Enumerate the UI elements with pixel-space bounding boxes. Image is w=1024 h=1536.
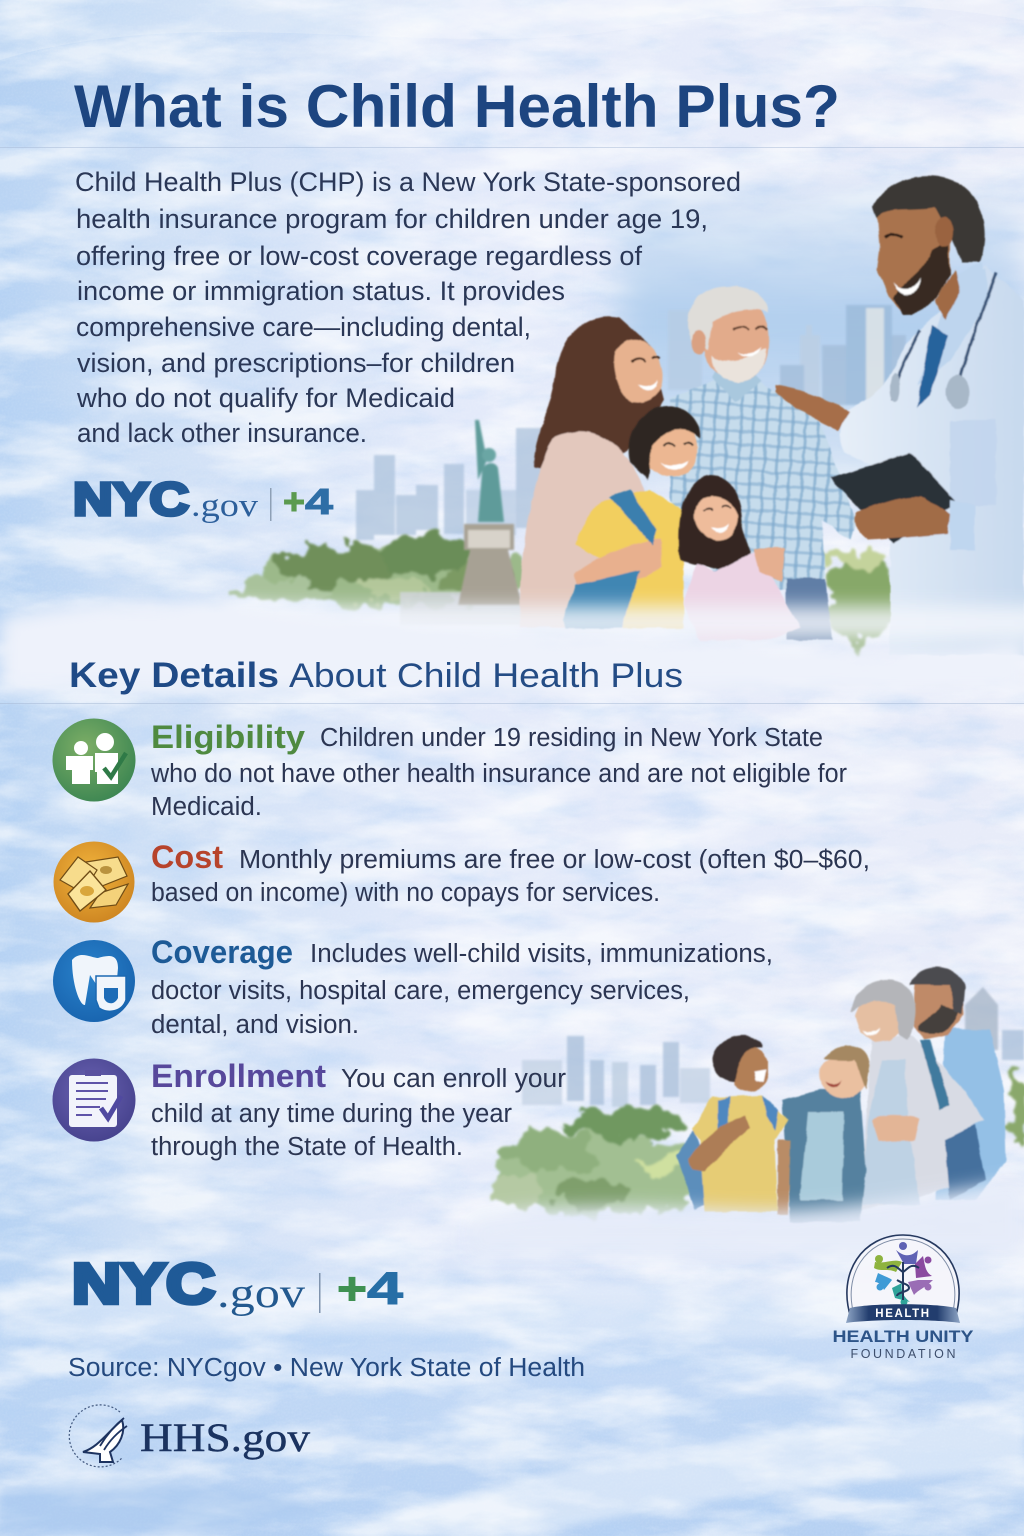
logo: Health Unity Foundation: HEALTH (875, 1308, 931, 1320)
emblem: pinwheel with caduceus (874, 1242, 933, 1306)
row: enrollment: child at any time during the year (151, 1100, 512, 1128)
doctor (775, 176, 1024, 655)
logo: NYC.gov +4 (bottom): 4 (367, 1263, 403, 1314)
intro paragraph: Child Health Plus (CHP) is a New York State-sponsored (75, 167, 741, 197)
heading: key details: Key Details (69, 656, 279, 695)
icon: clipboard with check (52, 1058, 136, 1142)
row: cost: Monthly premiums are free or low-cost (often $0–$60, (239, 846, 870, 874)
Statue of Liberty (400, 420, 522, 625)
skyline right (668, 305, 906, 405)
boy in denim jacket (782, 1046, 870, 1222)
row: cost: based on income) with no copays for services. (151, 879, 660, 907)
row: enrollment: through the State of Health. (151, 1133, 463, 1161)
trees (232, 537, 898, 642)
intro paragraph: who do not qualify for Medicaid (76, 383, 455, 413)
row: cost (54, 839, 870, 922)
logo: NYC.gov +4 (bottom): NYC (72, 1252, 215, 1316)
skyline left (356, 428, 544, 540)
man in blue shirt (910, 967, 1006, 1200)
logo: NYC.gov +4 (bottom): + (337, 1263, 367, 1314)
intro paragraph: health insurance program for children under age 19, (76, 204, 708, 234)
logo: NYC.gov +4 (top): + (283, 481, 305, 522)
row: cost: Cost (151, 839, 223, 875)
logo: NYC.gov +4 (top): 4 (305, 481, 333, 522)
row: coverage: Coverage (151, 934, 293, 970)
trees and lawn (490, 1066, 1024, 1217)
intro paragraph: comprehensive care—including dental, (76, 312, 531, 342)
logo: NYC.gov +4 (bottom) (72, 1252, 403, 1317)
row: coverage: Includes well-child visits, immunizations, (310, 940, 773, 968)
icon: tooth and shield (53, 940, 135, 1022)
intro paragraph (75, 167, 741, 448)
grandmother (851, 980, 985, 1210)
intro paragraph: and lack other insurance. (77, 418, 367, 448)
logo: NYC.gov +4 (top): NYC (73, 473, 189, 525)
logo: Health Unity Foundation: HEALTH UNITY (832, 1328, 974, 1346)
row: eligibility (52, 718, 847, 821)
row: coverage: dental, and vision. (151, 1011, 359, 1039)
logo: NYC.gov +4 (bottom): .gov (217, 1271, 305, 1317)
row: coverage: doctor visits, hospital care, emergency services, (151, 977, 690, 1005)
intro paragraph: vision, and prescriptions–for children (77, 348, 515, 378)
logo: HHS.gov: HHS.gov (140, 1415, 310, 1460)
row: enrollment: Enrollment (151, 1058, 326, 1094)
scene: second family and park (470, 967, 1024, 1255)
row: eligibility: Eligibility (151, 719, 305, 755)
mother (520, 317, 664, 627)
row: enrollment (52, 1058, 567, 1161)
small girl in pink dress (679, 475, 800, 640)
row: eligibility: Children under 19 residing in New York State (320, 724, 823, 752)
row: eligibility: who do not have other health insurance and are not eligible for (150, 760, 847, 788)
source line: Source: NYCgov • New York State of Health (68, 1354, 585, 1382)
cloud fade under scene (0, 602, 1024, 690)
scene: city, family and doctor (0, 176, 1024, 690)
logo: Health Unity Foundation (832, 1235, 974, 1361)
icon: eligibility people with check (52, 718, 136, 802)
ribbon (846, 1304, 960, 1323)
boy in yellow shirt with backpack (676, 1035, 790, 1215)
grandfather (670, 286, 856, 640)
row: coverage (53, 934, 773, 1039)
row: enrollment: You can enroll your (341, 1065, 567, 1093)
child in yellow shirt with backpack (563, 406, 700, 628)
heading continuation: About Child Health Plus (289, 657, 683, 695)
intro paragraph: income or immigration status. It provides (77, 276, 565, 306)
logo: HHS.gov (69, 1405, 310, 1467)
logo: Health Unity Foundation: FOUNDATION (850, 1347, 956, 1361)
logo: NYC.gov +4 (top) (73, 473, 333, 525)
intro paragraph: offering free or low-cost coverage regardless of (76, 241, 642, 271)
row: eligibility: Medicaid. (151, 793, 262, 821)
skyline (522, 987, 1024, 1107)
cloud fade under second scene (470, 1180, 1024, 1255)
title: What is Child Health Plus? (74, 73, 840, 140)
sky patch behind the family (620, 185, 1024, 485)
logo: NYC.gov +4 (top): .gov (191, 488, 259, 524)
icon: money (54, 842, 134, 922)
